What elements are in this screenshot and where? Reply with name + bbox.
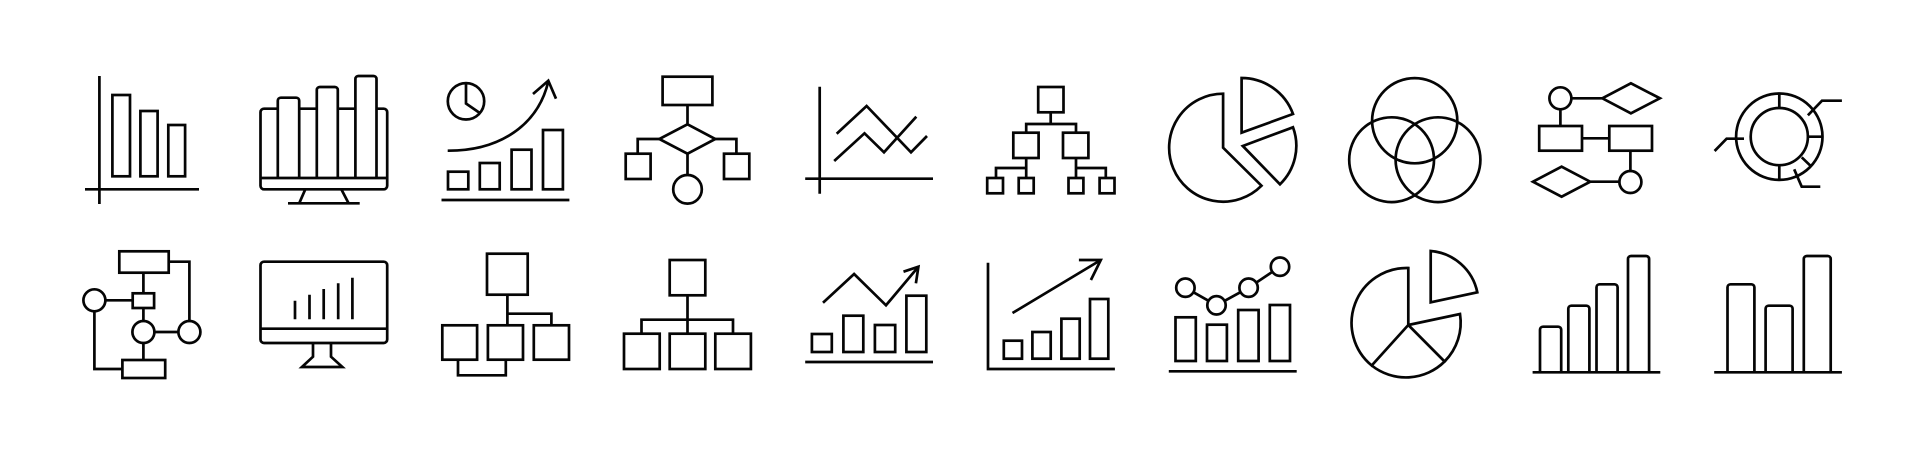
icon: exploded pie chart <box>1169 78 1296 202</box>
icon: pie chart with detached slice <box>1352 251 1477 377</box>
icon: three-circle venn diagram <box>1349 78 1480 202</box>
icon: decision flowchart <box>626 77 749 204</box>
icon: organisation tree <box>987 87 1114 193</box>
icon: four rising rounded bars <box>1533 256 1660 372</box>
icon: network flowchart <box>83 251 200 378</box>
icon: hierarchy with looped boxes <box>442 254 569 375</box>
icon: segmented ring chart with callouts <box>1715 93 1842 187</box>
icon: growth bars, arrow curve and small pie <box>442 81 569 200</box>
icon: process flow with circles and diamonds <box>1533 83 1660 197</box>
icon: descending bar chart with axes <box>85 76 199 204</box>
icon: monitor with bars rising above screen <box>260 76 387 203</box>
icon: three rounded bars <box>1714 256 1842 372</box>
icon: three-branch hierarchy <box>624 260 751 369</box>
icon: two-series line chart <box>805 87 933 194</box>
icon: bars with zigzag up arrow <box>805 267 933 362</box>
icon: bars with connected dot trend line <box>1169 258 1297 371</box>
icon: monitor with thin bar chart <box>260 262 387 367</box>
icon: bars with straight growth arrow and axes <box>988 260 1115 369</box>
